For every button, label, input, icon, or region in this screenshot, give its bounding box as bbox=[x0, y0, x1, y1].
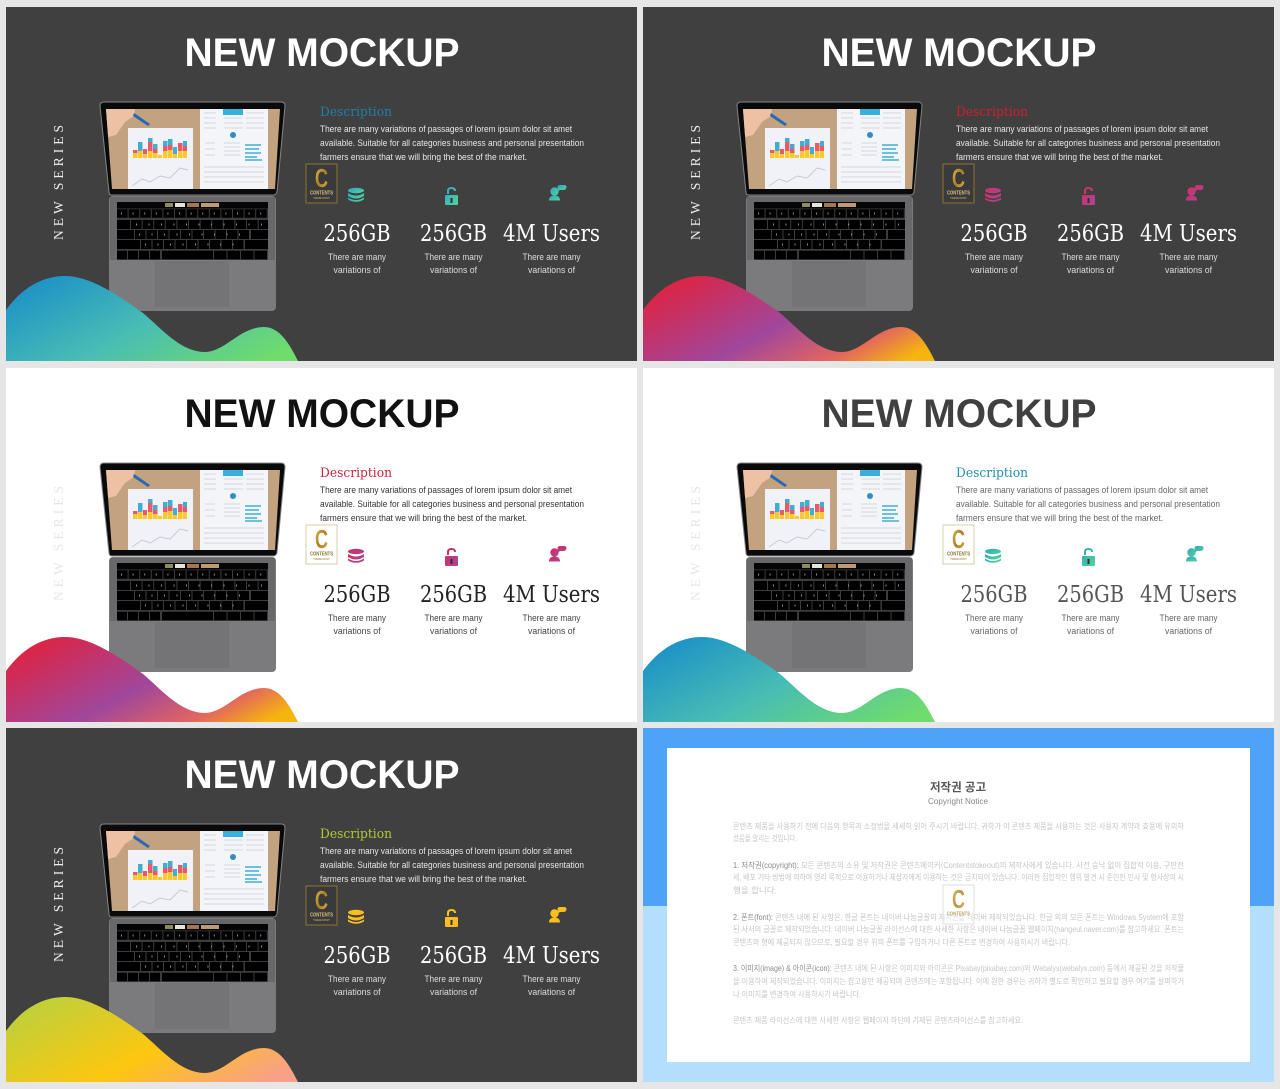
stat 2: variations of bbox=[1067, 265, 1114, 275]
stat 2: 256GB bbox=[1057, 221, 1124, 247]
logo badge: C bbox=[315, 885, 328, 915]
copyright body: 콘텐츠의 형에 제공되지 않으므로, 필요할 경우 위의 폰트를 구입하거나 다른 폰트로 변경하여 사용하시기 바랍니다. bbox=[733, 937, 1070, 947]
copyright body: 을 이용하여 제작되었습니다. 이미지는 참고용만 제공되며 콘텐츠에는 포함됩니다. 이에 원한 경우는 귀하가 별도로 확인하고 필요할 경우 여기를 살펴하거 bbox=[733, 976, 1184, 986]
stat 1: variations of bbox=[970, 626, 1018, 636]
description text: farmers ensure that we will bring the best of the market. bbox=[956, 152, 1163, 162]
icon: database bbox=[348, 910, 364, 924]
logo badge: THEBOOST bbox=[950, 196, 967, 200]
stat 1: There are many bbox=[328, 252, 386, 262]
icon: lock bbox=[445, 548, 458, 566]
description text: available. Suitable for all categories business and personal presentation bbox=[956, 499, 1220, 509]
logo badge: C bbox=[952, 524, 965, 554]
stat 2: 256GB bbox=[420, 943, 487, 969]
description heading: Description bbox=[320, 827, 393, 842]
description text: available. Suitable for all categories business and personal presentation bbox=[956, 138, 1220, 148]
description text bbox=[320, 846, 584, 884]
description text: available. Suitable for all categories business and personal presentation bbox=[320, 499, 584, 509]
laptop mockup bbox=[100, 102, 285, 311]
icon: database bbox=[985, 549, 1001, 563]
description text: farmers ensure that we will bring the best of the market. bbox=[320, 152, 527, 162]
panel: copyright notice bbox=[643, 728, 1274, 1082]
logo badge bbox=[306, 524, 337, 564]
stat 3 bbox=[503, 582, 600, 636]
stat 3: There are many bbox=[1160, 252, 1218, 262]
stat 1: 256GB bbox=[960, 221, 1028, 247]
icon: users bbox=[1186, 185, 1204, 200]
stat 1: variations of bbox=[334, 626, 381, 636]
copyright body: 세, 배포 기타 방법에 의하여 영리 목적으로 이용하거나 제삼자에게 이용하는 것은 금지되어 있습니다. 이러한 집합적인 행위 발견 시 준민한 민사 및 형사상의 시 bbox=[733, 872, 1184, 882]
stat 2: There are many bbox=[1062, 252, 1120, 262]
logo badge bbox=[943, 524, 974, 564]
stat 1: There are many bbox=[328, 974, 386, 984]
copyright body: 행을 합니다. bbox=[733, 885, 777, 895]
stat 1 bbox=[324, 943, 390, 997]
description text bbox=[320, 124, 584, 162]
laptop mockup bbox=[100, 463, 285, 672]
wave bbox=[643, 276, 935, 361]
description heading: Description bbox=[320, 466, 393, 481]
description text: farmers ensure that we will bring the best of the market. bbox=[956, 513, 1163, 523]
stat 3: 4M Users bbox=[503, 582, 600, 608]
logo badge: C bbox=[315, 524, 328, 554]
logo badge: CONTENTS bbox=[310, 912, 333, 918]
stat 3 bbox=[1140, 221, 1237, 275]
icon: lock bbox=[1082, 187, 1095, 205]
logo badge: THEBOOST bbox=[313, 196, 330, 200]
title: NEW MOCKUP bbox=[184, 753, 460, 797]
description text: farmers ensure that we will bring the best of the market. bbox=[320, 874, 527, 884]
copyright body: 나 이미지를 변경하여 사용하시기 바랍니다. bbox=[733, 989, 861, 999]
panel: white slide blue bbox=[643, 368, 1274, 722]
wave bbox=[6, 997, 298, 1082]
logo badge: CONTENTS bbox=[947, 190, 970, 196]
stat 3: variations of bbox=[528, 265, 575, 275]
logo badge bbox=[306, 163, 337, 203]
stat 2 bbox=[420, 943, 487, 997]
copyright body: 콘텐츠 제품을 사용하기 전에 다음의 항목과 소정법을 세세히 읽어 주시기 바랍니다. 귀하가 이 콘텐츠 제품을 사용하는 것은 사용자 계약과 효용에 유의하 bbox=[733, 821, 1185, 831]
stat 3: There are many bbox=[522, 613, 581, 623]
copyright body: 1. 저작권(copyright): 모든 콘텐츠의 소유 및 저작권은 콘텐츠메이커(Contentstokeout)의 제작사에게 있습니다. 사전 승낙 없이 집합적 이용, 구만전 bbox=[733, 860, 1184, 870]
description text: There are many variations of passages of lorem ipsum dolor sit amet bbox=[956, 124, 1208, 134]
icon: database bbox=[348, 549, 364, 563]
title: NEW MOCKUP bbox=[822, 392, 1096, 436]
stat 3 bbox=[503, 221, 600, 275]
stat 3: There are many bbox=[522, 252, 581, 262]
description text bbox=[320, 485, 584, 523]
copyright body: 3. 이미지(image) & 아이콘(icon): 콘텐츠 내에 된 사항은 이미지와 아이콘은 Pixabay(pixabay.com)와 Webalys(webalys.com) 등에서 제공된 것을 저작물 bbox=[733, 963, 1184, 973]
stat 2 bbox=[420, 582, 487, 636]
stat 1: variations of bbox=[970, 265, 1018, 275]
wave bbox=[6, 637, 298, 722]
copyright body bbox=[733, 821, 1185, 1025]
icon: lock bbox=[445, 187, 458, 205]
title: NEW MOCKUP bbox=[822, 31, 1096, 75]
icon: users bbox=[549, 907, 566, 922]
wave bbox=[643, 637, 935, 722]
side label: NEW SERIES bbox=[51, 847, 66, 962]
description text: available. Suitable for all categories business and personal presentation bbox=[320, 860, 584, 870]
stat 3: 4M Users bbox=[503, 221, 600, 247]
stat 2: There are many bbox=[424, 974, 483, 984]
stat 1: 256GB bbox=[324, 943, 390, 969]
stat 2: variations of bbox=[1067, 626, 1114, 636]
stat 2: variations of bbox=[430, 987, 477, 997]
icon: lock bbox=[1082, 548, 1095, 566]
stat 3: There are many bbox=[522, 974, 581, 984]
stat 1: 256GB bbox=[960, 582, 1028, 608]
description text: There are many variations of passages of lorem ipsum dolor sit amet bbox=[320, 846, 572, 856]
stat 2: 256GB bbox=[420, 582, 487, 608]
logo badge: THEBOOST bbox=[313, 918, 330, 922]
stat 1: variations of bbox=[334, 987, 381, 997]
laptop mockup bbox=[737, 463, 922, 672]
stat 3: variations of bbox=[1165, 265, 1212, 275]
stat 2 bbox=[420, 221, 487, 275]
stat 2: There are many bbox=[1062, 613, 1120, 623]
logo badge: CONTENTS bbox=[310, 552, 333, 558]
stat 3: variations of bbox=[528, 626, 575, 636]
logo watermark: C bbox=[952, 884, 965, 914]
stat 1: There are many bbox=[965, 252, 1023, 262]
stat 3: There are many bbox=[1160, 613, 1218, 623]
description text bbox=[956, 485, 1220, 523]
stat 1 bbox=[960, 582, 1028, 636]
copyright body: 된 사서의 글꼴로 제작되었습니다. 네이버 나눔글꼴 라이선스에 대한 사세한 사항은 네이버 나눔글꼴 웹페이지(hangeul.naver.com)를 참고하세요. 폰트는 bbox=[733, 924, 1184, 934]
stat 3: 4M Users bbox=[1140, 221, 1237, 247]
stat 1: 256GB bbox=[324, 221, 390, 247]
side label: NEW SERIES bbox=[51, 125, 66, 240]
description text: available. Suitable for all categories business and personal presentation bbox=[320, 138, 584, 148]
logo badge bbox=[943, 163, 974, 203]
side label: NEW SERIES bbox=[688, 125, 703, 240]
logo badge: THEBOOST bbox=[950, 557, 967, 561]
stat 1: There are many bbox=[328, 613, 386, 623]
logo badge: CONTENTS bbox=[310, 190, 333, 196]
logo badge bbox=[306, 885, 337, 925]
stat 2 bbox=[1057, 221, 1124, 275]
stat 2: variations of bbox=[430, 265, 477, 275]
description heading: Description bbox=[956, 105, 1029, 120]
stat 1 bbox=[324, 582, 390, 636]
title: NEW MOCKUP bbox=[184, 31, 460, 75]
description text: farmers ensure that we will bring the best of the market. bbox=[320, 513, 527, 523]
side label: NEW SERIES bbox=[51, 486, 66, 601]
icon: users bbox=[549, 546, 566, 562]
stat 2: 256GB bbox=[1057, 582, 1124, 608]
icon: database bbox=[348, 188, 364, 202]
stat 2 bbox=[1057, 582, 1124, 636]
panel: dark slide red bbox=[643, 7, 1274, 361]
panel: white slide red bbox=[6, 368, 637, 722]
description text: There are many variations of passages of lorem ipsum dolor sit amet bbox=[956, 485, 1208, 495]
logo watermark: CONTENTS bbox=[947, 912, 970, 918]
panel: dark slide blue bbox=[6, 7, 637, 361]
stat 3: 4M Users bbox=[503, 943, 600, 969]
copyright body: 2. 폰트(font): 콘텐츠 내에 된 사항은, 한글 폰트는 네이버 나눔글꼴의 저작권을 네이버 제작되었습니다. 한글 외의 모든 폰트는 Windows System에 포함 bbox=[733, 912, 1185, 922]
stat 3 bbox=[503, 943, 600, 997]
stat 1 bbox=[960, 221, 1028, 275]
stat 1: variations of bbox=[334, 265, 381, 275]
icon: users bbox=[1186, 546, 1204, 562]
copyright title: 저작권 공고 bbox=[930, 780, 986, 794]
copyright subtitle: Copyright Notice bbox=[928, 796, 988, 806]
laptop mockup bbox=[737, 102, 922, 311]
logo watermark bbox=[943, 884, 974, 924]
stat 3 bbox=[1140, 582, 1237, 636]
description heading: Description bbox=[320, 105, 393, 120]
stat 3: variations of bbox=[1165, 626, 1212, 636]
wave bbox=[6, 276, 298, 361]
logo badge: THEBOOST bbox=[313, 557, 330, 561]
logo badge: CONTENTS bbox=[947, 552, 970, 558]
stat 1: There are many bbox=[965, 613, 1023, 623]
stat 2: variations of bbox=[430, 626, 477, 636]
description heading: Description bbox=[956, 466, 1029, 481]
logo badge: C bbox=[315, 163, 328, 193]
description text: There are many variations of passages of lorem ipsum dolor sit amet bbox=[320, 485, 572, 495]
copyright body: 셨음을 알리는 것입니다. bbox=[733, 833, 797, 843]
laptop mockup bbox=[100, 824, 285, 1033]
description text: There are many variations of passages of lorem ipsum dolor sit amet bbox=[320, 124, 572, 134]
stat 2: There are many bbox=[424, 252, 483, 262]
stat 1 bbox=[324, 221, 390, 275]
stat 3: variations of bbox=[528, 987, 575, 997]
stat 2: There are many bbox=[424, 613, 483, 623]
side label: NEW SERIES bbox=[688, 486, 703, 601]
description text bbox=[956, 124, 1220, 162]
title: NEW MOCKUP bbox=[184, 392, 460, 436]
icon: users bbox=[549, 185, 566, 200]
stat 1: 256GB bbox=[324, 582, 390, 608]
icon: lock bbox=[445, 909, 458, 927]
copyright body: 콘텐츠 제품 라이선스에 대한 사세한 사항은 웹페이지 하단에 기재된 콘텐츠라이선스를 참고하세요. bbox=[733, 1015, 1023, 1025]
panel: dark slide yellow bbox=[6, 728, 637, 1082]
icon: database bbox=[985, 188, 1001, 202]
stat 3: 4M Users bbox=[1140, 582, 1237, 608]
logo badge: C bbox=[952, 163, 965, 193]
stat 2: 256GB bbox=[420, 221, 487, 247]
